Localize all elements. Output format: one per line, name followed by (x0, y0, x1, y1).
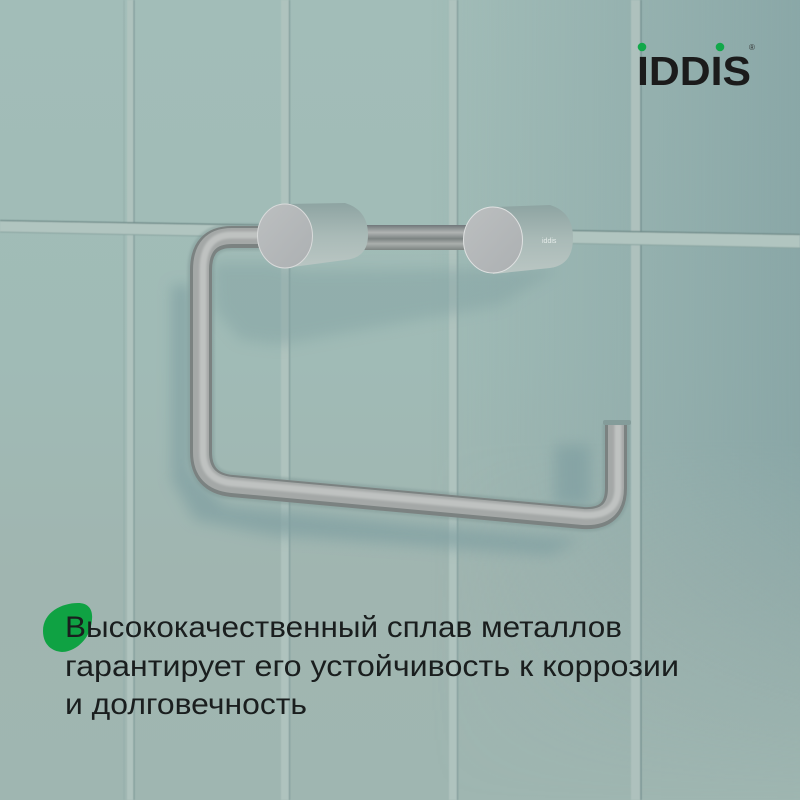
engraved brand mark: iddis (542, 238, 557, 245)
caption text: и долговечность (65, 688, 307, 721)
curved tube (201, 235, 621, 518)
left mount (258, 203, 368, 268)
caption text: Высококачественный сплав металлов (65, 611, 622, 644)
toilet paper holder (201, 203, 631, 518)
tube end cap (603, 420, 631, 425)
cast shadows of holder (172, 262, 590, 555)
caption text (65, 611, 679, 721)
connecting rod (318, 225, 468, 250)
right mount (464, 205, 573, 274)
logo green dots (638, 43, 724, 51)
logo: IDDIS (637, 43, 755, 94)
caption with green accent (43, 603, 679, 721)
logo wordmark: IDDIS (637, 48, 751, 94)
registered mark: ® (749, 43, 755, 52)
green blob accent (43, 603, 92, 652)
caption text: гарантирует его устойчивость к коррозии (65, 650, 679, 683)
